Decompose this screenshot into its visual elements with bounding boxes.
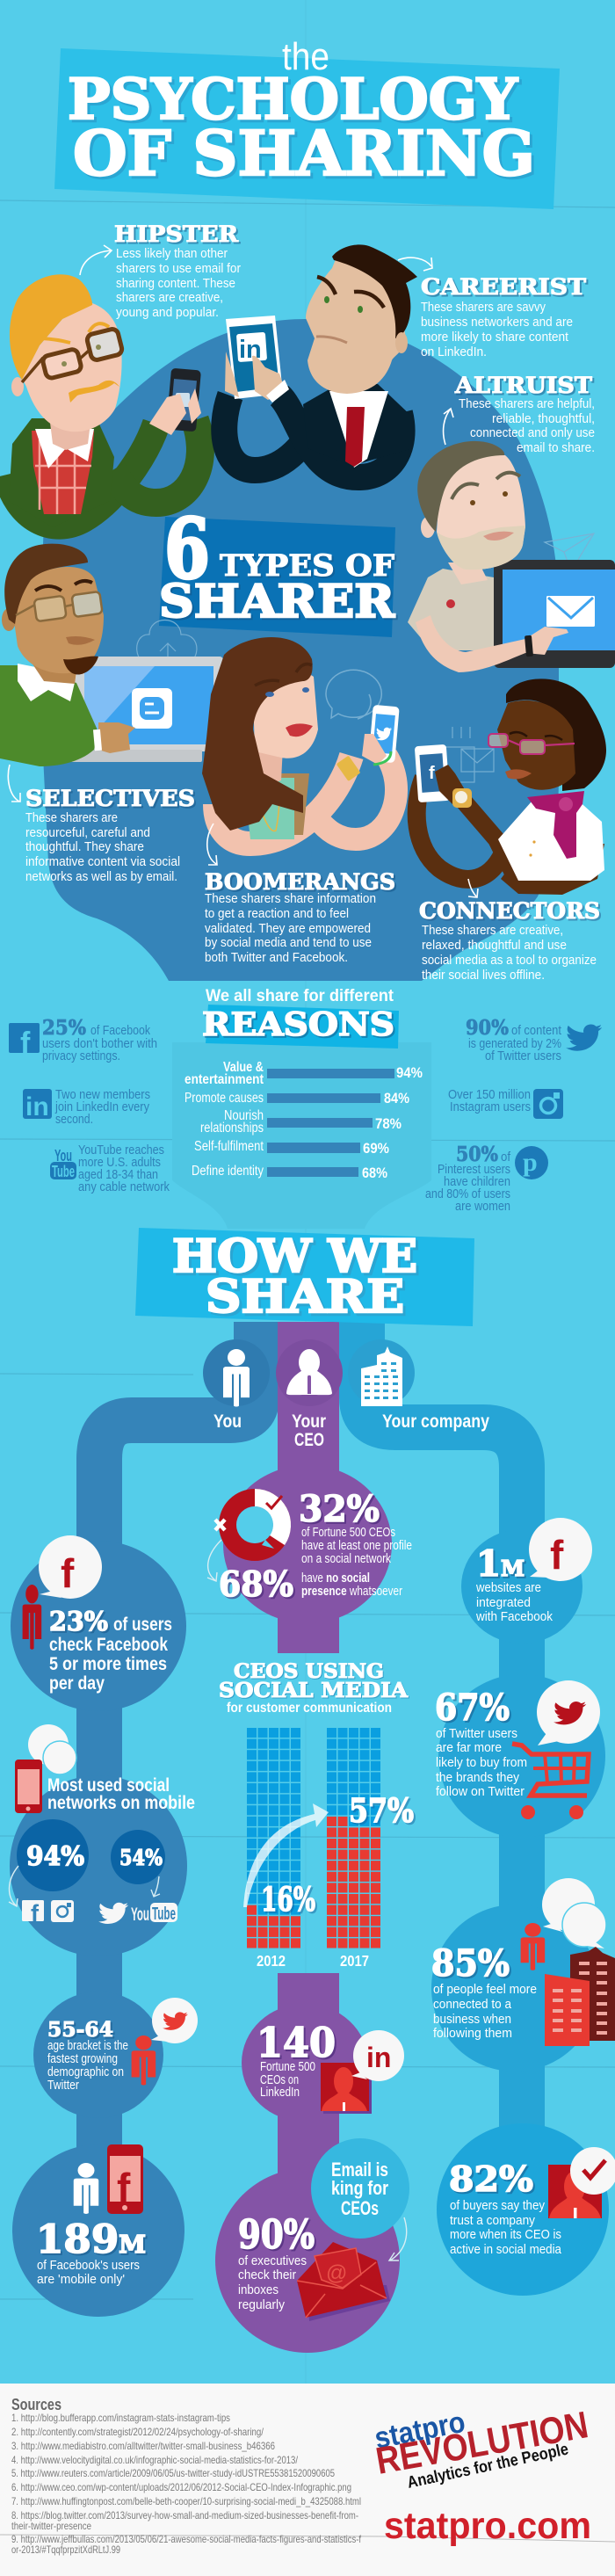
stat: 68 percent ceos: presence whatsoever	[301, 1584, 402, 1599]
sources list: 1. http://blog.bufferapp.com/instagram-stats-instagram-tips	[11, 2412, 230, 2424]
stat: 1M websites: 1M	[476, 1543, 525, 1585]
stat: 82 percent: more when its CEO is	[450, 2227, 561, 2242]
stat: 57 percent: 57%	[349, 1791, 414, 1830]
stat: 68 percent ceos: 68%	[219, 1564, 293, 1605]
stat: 189M mobile only	[36, 2217, 146, 2287]
icon: facebook	[22, 1900, 44, 1927]
hipster heading and text: young and popular.	[116, 305, 219, 320]
title lines: PSYCHOLOGY	[68, 67, 518, 133]
panel: 6 types of sharer	[159, 501, 395, 637]
facebook bubble and red person: f	[61, 1550, 75, 1596]
arrow: donut to 68 percent	[207, 1540, 221, 1581]
stat: pinterest users: p	[523, 1148, 538, 1177]
ceos using social media heading: CEOS USING	[234, 1660, 384, 1683]
stat: 90 percent executives: of executives	[238, 2253, 307, 2268]
twitter bubble and person	[132, 1998, 198, 2086]
icon: white person and facebook phone: f	[117, 2165, 131, 2210]
stat: 140 ceos on linkedin	[257, 2019, 336, 2100]
arrow: altruist	[444, 409, 453, 445]
selectives heading and text: networks as well as by email.	[25, 869, 177, 884]
ceo portrait and linkedin bubble	[321, 2030, 404, 2114]
stat: 32 percent ceos: have at least one profile	[301, 1538, 412, 1553]
stat: twitter content: 90%	[466, 1016, 509, 1040]
icon: you	[223, 1349, 250, 1407]
stat: pinterest users: of	[501, 1150, 511, 1165]
stat: pinterest users: Pinterest users	[438, 1162, 510, 1177]
stat: pinterest users: have children	[444, 1174, 510, 1189]
facebook bubble right: f	[550, 1532, 564, 1578]
careerist heading and text: on LinkedIn.	[421, 345, 487, 359]
label: your company: Your company	[382, 1411, 489, 1432]
reasons heading: REASONS	[202, 1006, 394, 1043]
stat: 23 percent: of users	[113, 1615, 172, 1635]
stat: 55-64 age bracket: age bracket is the	[47, 2038, 128, 2053]
email is king bubble	[311, 2138, 409, 2239]
icon: twitter	[98, 1903, 128, 1924]
stat: 55-64 age bracket	[47, 2018, 128, 2093]
icon: mail and cup outline	[439, 727, 494, 782]
stat: 32 percent ceos	[299, 1488, 412, 1566]
careerist heading and text: business networkers and are	[421, 315, 573, 330]
stat: pinterest users: 50%	[456, 1143, 498, 1166]
icon: speech bubble outline	[326, 670, 381, 719]
careerist heading and text: These sharers are savvy	[421, 300, 546, 315]
icon: cloud upload outline	[137, 620, 197, 672]
stat: facebook privacy: f	[20, 1027, 31, 1060]
stat: 23 percent: 5 or more times	[49, 1654, 167, 1674]
stat: 23 percent: check Facebook	[49, 1635, 168, 1655]
how we share heading: HOW WE	[172, 1230, 417, 1283]
icon: ceo	[286, 1349, 332, 1395]
stat: 189M mobile only: are 'mobile only'	[37, 2272, 125, 2287]
stat: 140 ceos on linkedin: Fortune 500	[260, 2059, 315, 2074]
stat: facebook privacy: users don't bother with	[42, 1036, 157, 1051]
stat: twitter content: of Twitter users	[485, 1049, 561, 1063]
sources list	[11, 2412, 362, 2556]
stat: twitter content: of content	[511, 1023, 562, 1038]
waffle chart 2017	[327, 1728, 380, 1970]
stat: 67 percent twitter: follow on Twitter	[436, 1784, 525, 1799]
label: your ceo	[292, 1411, 326, 1450]
icon: facebook: f	[31, 1900, 40, 1927]
icon: youtube: You	[131, 1905, 149, 1925]
stat: 68 percent ceos	[219, 1564, 402, 1605]
reasons intro: We all share for different	[206, 987, 394, 1005]
panel: 6 types of sharer: 6	[164, 501, 210, 598]
stat: 140 ceos on linkedin: LinkedIn	[260, 2085, 300, 2100]
shield backdrop	[172, 1042, 431, 1229]
facebook bubble and red person	[23, 1535, 102, 1650]
bar chart: reasons: Define identity	[192, 1164, 264, 1179]
bar chart: reasons: Nourish	[224, 1108, 264, 1123]
ceo donut chart 32 percent	[215, 1489, 291, 1552]
text: most used social networks: Most used social	[47, 1775, 170, 1796]
email is king bubble: Email is	[331, 2159, 388, 2181]
careerist heading and text: more likely to share content	[421, 330, 569, 345]
dark blue background blob for six sharer types	[43, 319, 559, 981]
circle: 94 percent: 94%	[26, 1841, 84, 1872]
title word: the: the	[282, 35, 329, 78]
ceo portrait and check bubble	[548, 2147, 615, 2218]
stat: 189M mobile only: 189M	[36, 2217, 146, 2262]
selectives heading and text: thoughtful. They share	[25, 839, 144, 854]
stat: 23 percent	[49, 1607, 172, 1694]
bar chart: reasons: Self-fulfilment	[194, 1139, 264, 1154]
arrow: growth from 2012 to 2017	[243, 1803, 329, 1907]
stat: linkedin members: second.	[55, 1112, 93, 1127]
circle: 54 percent	[111, 1830, 165, 1884]
label: your ceo: CEO	[294, 1430, 324, 1450]
hipster heading and text: sharers are creative,	[116, 290, 223, 305]
stat: 67 percent twitter: of Twitter users	[436, 1726, 517, 1741]
stat: youtube reach: YouTube reaches	[78, 1143, 164, 1157]
stat: 85 percent: 85%	[431, 1942, 510, 1985]
sources list: 9. http://www.jeffbullas.com/2013/05/06/21-awesome-social-media-facts-figures-and-statistics-f	[11, 2533, 362, 2545]
stat: linkedin members: join LinkedIn every	[54, 1099, 149, 1114]
connectors heading and text: their social lives offline.	[422, 968, 545, 983]
how we share heading	[135, 1228, 474, 1326]
stat: 55-64 age bracket: fastest growing	[47, 2051, 118, 2066]
circle: 54 percent: 54%	[119, 1845, 163, 1870]
sources list: their-twitter-presence	[11, 2520, 91, 2532]
hipster heading and text: sharers to use email for	[116, 261, 241, 276]
careerist heading and text: CAREERIST	[421, 274, 586, 300]
altruist heading and text: ALTRUIST	[454, 373, 592, 398]
stat: 85 percent: connected to a	[433, 1997, 512, 2012]
selectives heading and text: SELECTIVES	[25, 786, 195, 811]
stat: 90 percent executives: check their	[238, 2268, 296, 2282]
flow: company path (right)	[348, 1322, 609, 2296]
stat: 85 percent	[431, 1942, 537, 2041]
stat: 90 percent executives: inboxes	[238, 2282, 279, 2297]
connectors heading and text: These sharers are creative,	[422, 923, 563, 938]
connectors heading and text: social media as a tool to organize	[422, 953, 597, 968]
selectives heading and text: resourceful, careful and	[25, 825, 150, 840]
bar chart: reasons: 69%	[363, 1140, 389, 1157]
stat: youtube reach: any cable network	[78, 1179, 170, 1194]
icon: envelope	[546, 596, 595, 627]
connectors heading and text: CONNECTORS	[419, 898, 600, 924]
sources heading: Sources	[11, 2396, 62, 2413]
altruist heading and text: connected and only use	[470, 425, 595, 440]
hipster heading and text	[114, 221, 241, 320]
stat: 82 percent: trust a company	[450, 2213, 535, 2228]
sources list: 3. http://www.mediabistro.com/alltwitter/twitter-small-business_b46366	[11, 2440, 275, 2452]
icon: paper plane outline	[545, 533, 594, 571]
stat: 90 percent executives	[238, 2211, 315, 2312]
stat: pinterest users: are women	[455, 1199, 510, 1214]
icon: blogger	[132, 688, 172, 729]
bar chart: reasons: relationships	[200, 1121, 264, 1136]
boomerangs heading and text: both Twitter and Facebook.	[205, 950, 348, 965]
icon: company building	[361, 1346, 402, 1406]
altruist heading and text: reliable, thoughtful,	[492, 411, 595, 426]
icon: shopping cart	[512, 1744, 589, 1819]
mobile networks block	[9, 1724, 195, 1927]
stat: 67 percent twitter: 67%	[435, 1687, 510, 1729]
stat: facebook privacy: of Facebook	[90, 1023, 150, 1038]
stat: youtube reach: aged 18-34 than	[78, 1167, 158, 1182]
sources list: or-2013/#TqqfprpzitXdRLtJ.99	[11, 2543, 120, 2556]
connectors heading and text: relaxed, thoughtful and use	[422, 938, 567, 953]
stat: youtube reach: You	[54, 1147, 72, 1165]
bar chart: reasons: 78%	[375, 1115, 402, 1132]
stat: facebook privacy: privacy settings.	[42, 1049, 120, 1063]
character: selectives	[0, 544, 223, 766]
label: you: You	[213, 1411, 242, 1432]
connectors heading and text	[419, 898, 600, 983]
sources list: 5. http://www.reuters.com/article/2009/06/05/us-twitter-study-idUSTRE55381520090605	[11, 2467, 335, 2479]
stat: 68 percent ceos: have no social	[301, 1571, 370, 1586]
boomerangs heading and text: These sharers share information	[205, 891, 376, 906]
icon: white person and facebook phone	[74, 2144, 143, 2214]
stat: 85 percent: of people feel more	[433, 1982, 537, 1997]
arrow: email to envelope	[389, 2217, 407, 2260]
stat: 85 percent: following them	[433, 2026, 512, 2041]
careerist heading and text	[421, 274, 586, 359]
stat: 90 percent executives: regularly	[238, 2297, 285, 2312]
stat: 140 ceos on linkedin: CEOs on	[260, 2072, 299, 2087]
stat: 55-64 age bracket: demographic on	[47, 2064, 124, 2079]
stat: 16 percent: 16%	[261, 1880, 315, 1919]
stat: 140 ceos on linkedin: 140	[257, 2019, 336, 2066]
character: boomerangs	[202, 637, 400, 844]
stat: 1M websites: websites are	[475, 1580, 541, 1595]
ceos using social media heading	[219, 1660, 409, 1716]
label: your ceo: Your	[292, 1411, 326, 1432]
text: most used social networks: networks on mobile	[47, 1793, 195, 1813]
icon: instagram	[51, 1900, 74, 1922]
altruist heading and text: email to share.	[517, 440, 595, 455]
waffle chart 2012: 2012	[257, 1952, 286, 1970]
selectives heading and text: informative content via social	[25, 854, 180, 869]
arrow: connectors	[468, 879, 478, 897]
title panel	[54, 48, 560, 209]
stat: 85 percent: business when	[433, 2012, 511, 2027]
title lines: OF SHARING	[73, 117, 535, 190]
title lines	[68, 67, 535, 190]
facebook bubble right	[529, 1518, 592, 1581]
bar chart: reasons: 94%	[396, 1064, 423, 1081]
twitter bubble right	[537, 1680, 600, 1745]
stat: 82 percent	[449, 2159, 562, 2257]
altruist heading and text: These sharers are helpful,	[459, 396, 595, 411]
stat: linkedin members: in	[25, 1092, 49, 1121]
stat: 1M websites	[475, 1543, 553, 1624]
stat: instagram users: Instagram users	[450, 1099, 531, 1114]
waffle chart 2012	[247, 1728, 300, 1970]
stat: linkedin members	[23, 1087, 150, 1127]
reasons section	[172, 987, 431, 1229]
stat: 23 percent: per day	[49, 1673, 105, 1694]
stat: 189M mobile only: of Facebook's users	[37, 2258, 140, 2273]
hipster heading and text: HIPSTER	[114, 221, 238, 247]
ceos using social media heading: SOCIAL MEDIA	[219, 1679, 409, 1702]
sources list: 7. http://www.huffingtonpost.com/belle-beth-cooper/10-surprising-social-medi_b_4325088.html	[11, 2495, 361, 2507]
icon: open envelope	[297, 2242, 390, 2321]
circle: 94 percent	[17, 1819, 89, 1891]
icon: speech bubbles	[28, 1724, 76, 1774]
stat: 32 percent ceos: 32%	[299, 1488, 380, 1530]
boomerangs heading and text: validated. They are empowered	[205, 921, 371, 936]
character: connectors	[415, 678, 606, 895]
stat: 23 percent: 23%	[49, 1607, 108, 1637]
stat: youtube reach: Tube	[52, 1163, 75, 1180]
selectives heading and text: These sharers are	[25, 810, 118, 825]
sources list: 4. http://www.velocitydigital.co.uk/infographic-social-media-statistics-for-2013/	[11, 2454, 299, 2466]
stat: 55-64 age bracket: 55-64	[47, 2018, 113, 2042]
bar chart: reasons: Promote causes	[184, 1091, 264, 1106]
stat: linkedin members: Two new members	[55, 1087, 150, 1102]
sources list: 2. http://contently.com/strategist/2012/02/24/psychology-of-sharing/	[11, 2426, 264, 2438]
email is king bubble: CEOs	[341, 2197, 379, 2219]
bar chart: reasons: Value &	[223, 1060, 264, 1075]
panel: 6 types of sharer: SHARER	[159, 576, 395, 628]
stat: youtube reach	[50, 1143, 170, 1194]
arrow: selectives	[8, 765, 20, 802]
stat: 67 percent twitter	[435, 1687, 527, 1799]
icon: youtube	[131, 1903, 177, 1925]
bar chart: reasons: entertainment	[184, 1072, 264, 1087]
title	[54, 35, 560, 209]
stat: 1M websites: with Facebook	[475, 1609, 553, 1624]
character: careerist	[224, 244, 417, 477]
boomerangs heading and text: BOOMERANGS	[205, 869, 395, 895]
ceos using social media heading: for customer communication	[227, 1701, 392, 1716]
stat: 90 percent executives: 90%	[238, 2211, 315, 2258]
icon: phone	[15, 1760, 42, 1813]
bar chart: reasons: 84%	[384, 1090, 409, 1107]
stat: 55-64 age bracket: Twitter	[47, 2078, 79, 2093]
character: careerist: in	[239, 336, 262, 364]
stat: facebook privacy: 25%	[42, 1016, 86, 1040]
panel: 6 types of sharer: TYPES OF	[220, 548, 394, 584]
website: statpro.com: statpro.com	[384, 2505, 591, 2547]
arrow: 94 percent to icons	[9, 1866, 18, 1906]
boomerangs heading and text: to get a reaction and to feel	[205, 906, 349, 921]
arrow: 54 percent to icons	[151, 1876, 160, 1897]
arrow: hipster	[80, 245, 112, 275]
stat: 67 percent twitter: likely to buy from	[436, 1755, 527, 1770]
arrow: boomerangs	[207, 824, 217, 865]
stat: 67 percent twitter: the brands they	[436, 1770, 519, 1785]
email is king bubble: king for	[331, 2177, 388, 2199]
bar chart: reasons: 68%	[362, 1165, 387, 1181]
panel: footer	[0, 2384, 615, 2576]
character: hipster	[7, 274, 201, 527]
stat: twitter content	[466, 1016, 602, 1063]
character: connectors: f	[429, 764, 435, 783]
stat: 32 percent ceos: of Fortune 500 CEOs	[301, 1525, 395, 1540]
waffle chart 2017: 2017	[340, 1952, 369, 1970]
icon: youtube: Tube	[152, 1905, 176, 1924]
icon: open envelope: @	[326, 2261, 347, 2285]
stat: 82 percent: of buyers say they	[450, 2198, 545, 2213]
bubbles, person and buildings	[521, 1878, 615, 2046]
selectives heading and text	[25, 786, 195, 884]
stat: 67 percent twitter: are far more	[436, 1740, 502, 1755]
stat: twitter content: is generated by 2%	[468, 1036, 561, 1051]
hipster heading and text: sharing content. These	[116, 276, 235, 291]
altruist heading and text	[454, 373, 595, 455]
stat: 82 percent: 82%	[449, 2159, 533, 2200]
logo: statpro revolution: Analytics for the People	[406, 2440, 570, 2493]
flow: you path (left)	[10, 1322, 270, 2317]
stat: 32 percent ceos: on a social network	[301, 1551, 391, 1566]
bar chart: reasons	[184, 1060, 423, 1181]
text: most used social networks	[47, 1775, 195, 1813]
stat: instagram users: Over 150 million	[448, 1087, 531, 1102]
stat: 1M websites: integrated	[476, 1595, 531, 1610]
stat: instagram users	[448, 1087, 563, 1119]
hipster heading and text: Less likely than other	[116, 246, 228, 261]
stat: pinterest users	[425, 1143, 548, 1214]
ceo portrait and linkedin bubble: in	[366, 2042, 391, 2073]
sources list: 8. https://blog.twitter.com/2013/survey-how-small-and-medium-sized-businesses-benefit-from-	[11, 2509, 358, 2522]
sources list: 6. http://www.ceo.com/wp-content/uploads/2012/06/2012-Social-CEO-Index-Infographic.png	[11, 2481, 351, 2493]
character: altruist	[408, 441, 615, 672]
boomerangs heading and text	[205, 869, 395, 965]
stat: youtube reach: more U.S. adults	[78, 1155, 161, 1170]
flow: ceo path (centre)	[215, 1322, 400, 2353]
how we share heading: SHARE	[206, 1271, 404, 1324]
stat: pinterest users: and 80% of users	[425, 1186, 510, 1201]
boomerangs heading and text: by social media and tend to use	[205, 935, 372, 950]
stat: facebook privacy	[9, 1016, 157, 1063]
logo: statpro revolution: statpro	[372, 2405, 468, 2456]
arrow: careerist	[398, 258, 432, 271]
stat: 82 percent: active in social media	[450, 2242, 562, 2257]
